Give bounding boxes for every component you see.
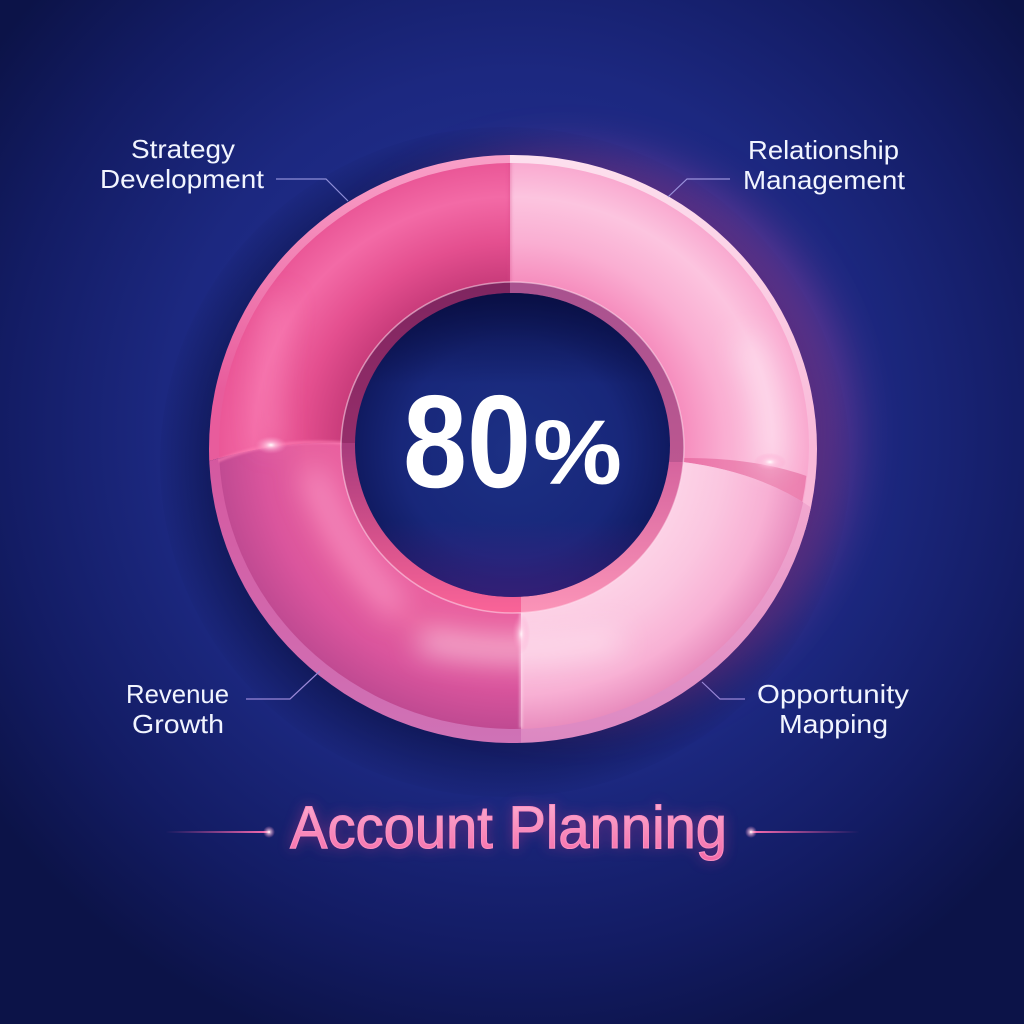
surface highlights: [215, 160, 771, 728]
title accent: left line: [165, 826, 275, 838]
label: revenue growth: Revenue: [126, 679, 229, 709]
label: revenue growth: [126, 679, 229, 739]
segment: strategy development: [209, 155, 510, 462]
title: account planning: Account Planning: [290, 794, 727, 861]
leader line: relationship management: [668, 179, 730, 197]
sparkle: right seam: [754, 453, 786, 471]
inner rim line: [341, 282, 684, 613]
leader line: revenue growth: [246, 671, 320, 699]
sparkle: left seam: [255, 436, 287, 454]
label: strategy development: [100, 134, 265, 194]
segment: opportunity mapping: [521, 462, 811, 743]
leader line: strategy development: [276, 179, 348, 201]
label: relationship management: Relationship: [748, 135, 899, 165]
title accent: right line: [745, 826, 860, 838]
label: strategy development: Strategy: [131, 134, 235, 164]
ring drop shadow and glow: [160, 127, 855, 797]
label: strategy development: Development: [100, 164, 265, 194]
leader line: opportunity mapping: [702, 682, 745, 699]
label: opportunity mapping: [757, 679, 909, 739]
segment: relationship management: [510, 155, 817, 530]
label: relationship management: [743, 135, 906, 195]
sparkle: bottom seam: [512, 614, 530, 654]
label: opportunity mapping: Opportunity: [757, 679, 909, 709]
donut chart: [209, 155, 817, 743]
label: opportunity mapping: Mapping: [779, 709, 888, 739]
label: relationship management: Management: [743, 165, 906, 195]
label: revenue growth: Growth: [132, 709, 224, 739]
centre value: 80%: 80: [403, 368, 531, 515]
segment: revenue growth: [209, 442, 521, 743]
centre value: 80%: %: [533, 402, 622, 504]
centre hole: [355, 293, 670, 597]
title: account planning: Account Planning: [290, 794, 727, 861]
